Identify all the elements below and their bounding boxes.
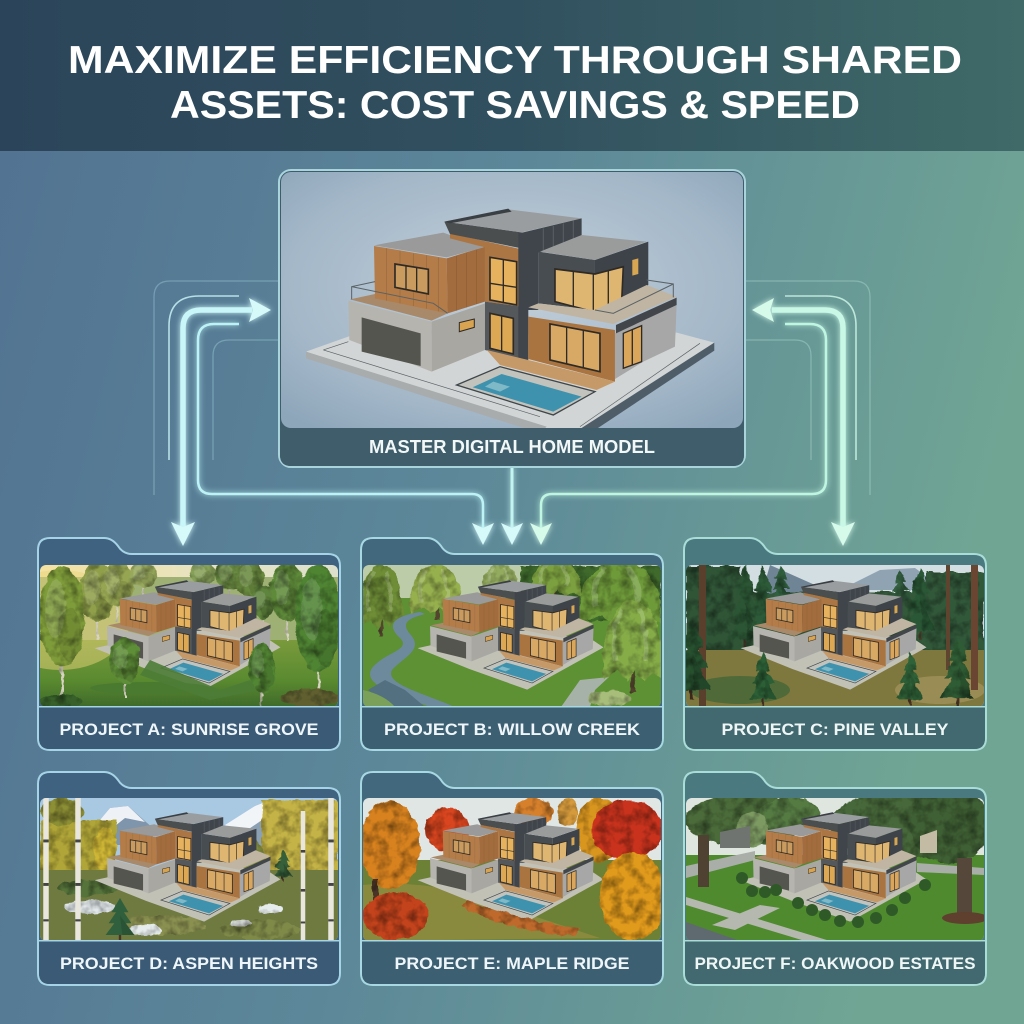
project B caption [362,706,662,749]
panel: project A folder [0,538,341,750]
panel: project F folder [684,772,990,985]
panel: project D folder [38,772,340,985]
project F caption: PROJECT F: OAKWOOD ESTATES [694,954,976,973]
project E caption [362,940,662,984]
project D caption [39,940,339,984]
project E image [360,798,666,941]
panel: project E folder [360,772,666,985]
project A caption [39,706,339,749]
master model render [281,172,743,433]
arrows: left loop [154,281,494,546]
project F image [685,787,990,941]
panel: master digital home model [279,170,745,467]
master caption: MASTER DIGITAL HOME MODEL [369,437,655,457]
project C caption: PROJECT C: PINE VALLEY [722,720,949,739]
project E caption: PROJECT E: MAPLE RIDGE [394,954,630,973]
master caption [280,428,744,466]
project A image [40,565,338,706]
title banner: ASSETS: COST SAVINGS & SPEED [170,84,860,127]
arrow: center down [501,467,523,545]
arrows: right loop [530,281,870,546]
project D caption: PROJECT D: ASPEN HEIGHTS [60,954,318,973]
project D image [40,796,338,941]
project C caption [685,706,985,749]
project A caption: PROJECT A: SUNRISE GROVE [60,720,318,739]
title banner: MAXIMIZE EFFICIENCY THROUGH SHARED [68,39,962,82]
project B caption: PROJECT B: WILLOW CREEK [384,720,641,739]
project F caption [685,940,985,984]
project B image [359,560,663,707]
title banner [0,0,1024,151]
panel: project B folder [359,538,663,750]
project C image [673,565,985,707]
panel: project C folder [673,538,986,750]
